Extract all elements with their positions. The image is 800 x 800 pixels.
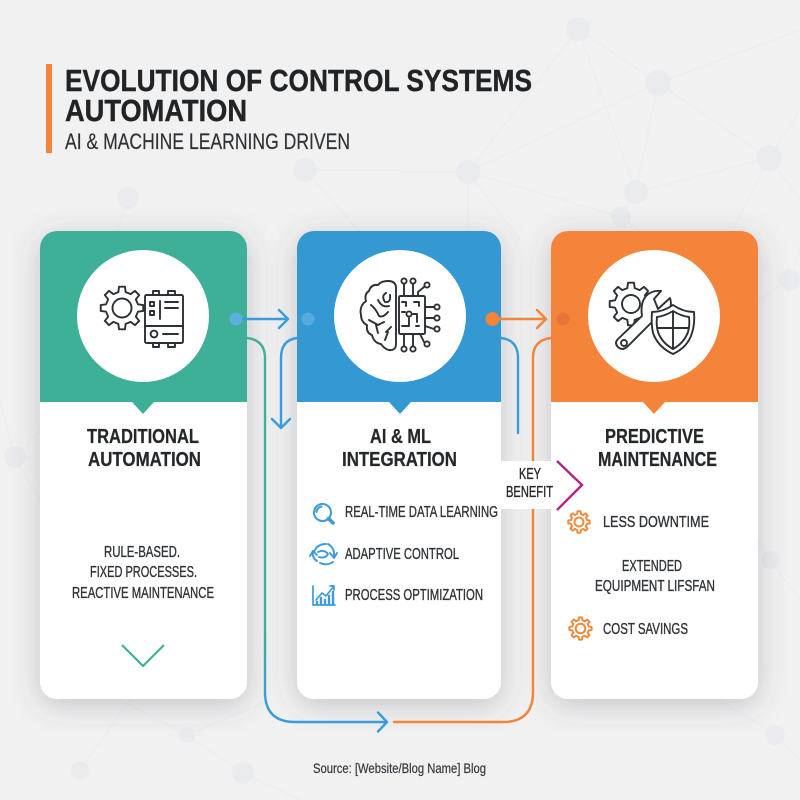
card body [551,231,758,699]
callout label: BENEFIT [506,484,553,501]
card description: RULE-BASED. [104,544,180,561]
line: ai right branch [501,338,518,433]
card body [297,231,501,699]
icon circle [334,250,466,382]
card heading: TRADITIONAL [87,425,199,448]
icon: down chevron [122,645,164,666]
callout label [506,466,553,501]
list item: cost savings: COST SAVINGS [603,621,688,638]
title block [46,63,532,154]
arrow: ai to predictive [486,310,570,328]
card description: REACTIVE MAINTENANCE [72,585,214,602]
icon: brain and chip [361,278,440,352]
callout chevron [557,461,582,510]
card header [297,231,501,414]
list item: adaptive control [310,544,459,564]
card heading: MAINTENANCE [598,448,717,471]
list item: less downtime [568,511,709,533]
icon: orange gear [569,617,592,640]
list item: cost savings [569,617,688,640]
connectors [230,310,570,732]
card heading: AI & ML [370,425,431,448]
callout: key benefit [501,461,582,510]
title accent bar [46,64,52,153]
icon: growth chart [313,586,335,605]
icon circle [77,250,209,382]
subtitle: AI & MACHINE LEARNING DRIVEN [65,129,350,154]
card body [40,231,247,699]
callout label: KEY [519,466,541,483]
callout background [501,461,553,509]
arrow: bottom loop to centre [247,338,387,732]
card heading: PREDICTIVE [605,425,704,448]
icon: gear and controller [101,287,183,347]
list item: adaptive control: ADAPTIVE CONTROL [345,546,459,563]
list item: real-time data learning: REAL-TIME DATA LEARNING [345,504,498,521]
card heading [342,425,457,471]
title: AUTOMATION [65,93,247,128]
title: EVOLUTION OF CONTROL SYSTEMS [65,63,532,98]
list item: real-time data learning [314,504,498,523]
icon: orange gear [568,511,590,533]
panel: ai and ml integration [297,231,501,699]
icon: magnifier [314,504,333,523]
panel: predictive maintenance [551,231,758,699]
list item: process optimization [313,586,483,605]
list item: extended equipment lifespan: EXTENDED [622,558,682,575]
card heading: AUTOMATION [88,448,201,471]
icon: gear wrench and shield [610,283,694,354]
list item: extended equipment lifespan [595,558,715,595]
card description: FIXED PROCESSES. [90,564,197,581]
list item: extended equipment lifespan: EQUIPMENT LIFSFAN [595,578,715,595]
panel: traditional automation [40,231,247,699]
arrow: ai down branch [272,338,297,428]
card heading [87,425,201,471]
title [65,63,532,128]
card heading: INTEGRATION [342,448,457,471]
card header [551,231,758,414]
card description [72,544,214,602]
icon: cycle arrows [310,544,337,564]
icon circle [588,250,720,382]
line: predictive return lower [394,509,533,722]
arrow: traditional to ai [230,310,314,328]
source note: Source: [Website/Blog Name] Blog [313,760,486,776]
list item: less downtime: LESS DOWNTIME [603,514,709,531]
card header [40,231,247,414]
card heading [598,425,717,471]
list item: process optimization: PROCESS OPTIMIZATION [345,587,483,604]
line: predictive return upper [533,338,551,462]
